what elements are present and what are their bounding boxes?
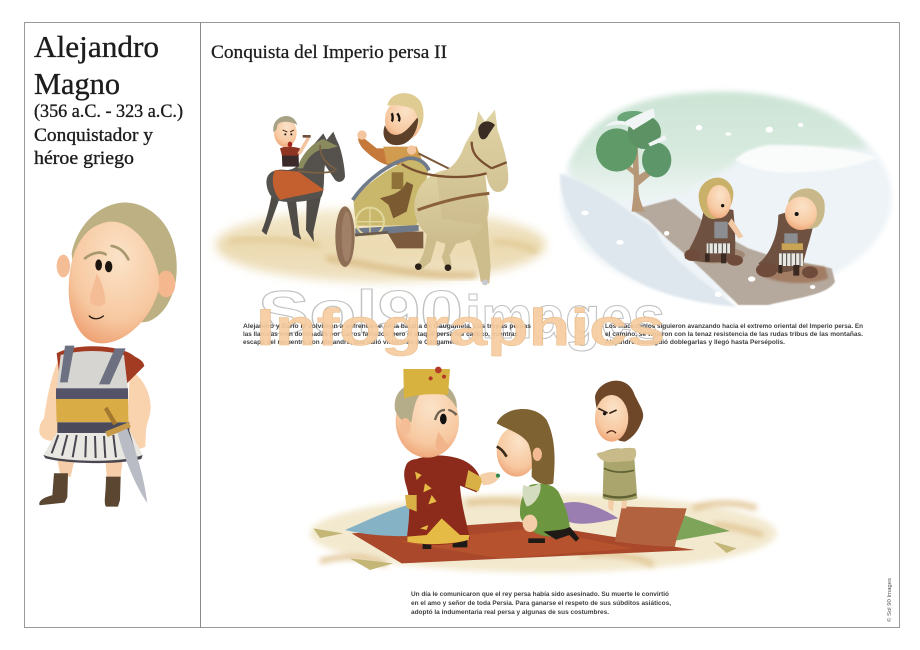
dark horse with rider xyxy=(262,116,345,242)
kneeling figure xyxy=(497,409,579,543)
sidebar heading: Alejandro Magno: Conquistador y xyxy=(34,125,154,146)
sidebar heading: Alejandro Magno: héroe griego xyxy=(34,148,134,169)
watermark: Sol90 images: Sol90 xyxy=(258,279,463,346)
skirt strips xyxy=(43,430,143,461)
marble floor xyxy=(310,494,777,573)
caption: bottom: en el amo y señor de toda Persia. Para ganarse el respeto de sus súbditos asiáticos, xyxy=(411,600,671,607)
sand ground xyxy=(216,208,546,282)
illustration: Alexander at the Persian court xyxy=(310,367,777,573)
chariot xyxy=(335,153,452,267)
caption: right: el camino, se toparon con la tenaz resistencia de las rudas tribus de las montañas. xyxy=(605,331,863,338)
snowflakes xyxy=(581,123,815,297)
ears xyxy=(57,255,70,277)
caption: left: escapó del recuentro con Alejandro, que salió victorioso de Gaugamela. xyxy=(243,339,460,346)
tunic xyxy=(57,346,144,384)
caption: left: las llanuras eran dominadas por carros falcados, pero el ataque persa fue caótico, mientras xyxy=(243,331,519,338)
illustration: chariot scene xyxy=(216,93,546,285)
rug xyxy=(352,522,695,563)
blue cushion xyxy=(345,504,418,536)
caption: right: Los macedonios siguieron avanzando hacia el extremo oriental del Imperio persa. En xyxy=(605,323,863,330)
soldier left xyxy=(684,178,745,266)
caption: bottom xyxy=(411,591,671,616)
caption: right xyxy=(605,323,863,346)
purple cushion xyxy=(563,502,618,524)
armour xyxy=(57,351,128,390)
credit: vertical: © Sol 90 Images xyxy=(886,578,893,622)
sword xyxy=(117,427,147,503)
watermark: Infographics: Infographics xyxy=(256,299,665,357)
legs xyxy=(56,453,123,477)
sidebar heading: Alejandro Magno: Magno xyxy=(34,66,120,101)
caption: bottom: adoptó la indumentaria real persa y algunas de sus costumbres. xyxy=(411,609,609,616)
sidebar heading: Alejandro Magno xyxy=(34,29,183,169)
illustration: snowy mountain path xyxy=(560,92,892,307)
watermark: Sol90 images xyxy=(258,279,665,351)
tree xyxy=(596,108,671,212)
caption: left: Alejandro y Darío III volvieron a enfrentarse en la batalla de Gaugamela. Las tropas persas xyxy=(243,323,532,330)
brown cushion xyxy=(615,507,687,547)
standing figure with crossed arms xyxy=(595,381,643,512)
hair back xyxy=(72,203,177,323)
king figure xyxy=(395,367,500,549)
sidebar heading: Alejandro Magno: Alejandro xyxy=(34,29,159,64)
charioteer xyxy=(357,93,424,165)
face xyxy=(85,246,128,259)
tassels xyxy=(313,528,737,570)
green cushion xyxy=(673,512,730,541)
sidebar heading: Alejandro Magno: (356 a.C. - 323 a.C.) xyxy=(34,101,183,122)
caption: right: Alejandro consiguió doblegarlas y llegó hasta Persépolis. xyxy=(605,339,785,346)
section heading: Conquista del Imperio persa II xyxy=(211,42,447,63)
arms xyxy=(39,360,70,441)
watermark: Sol90 images: images xyxy=(465,284,665,351)
tan horse xyxy=(402,110,508,285)
soldier right xyxy=(756,188,825,278)
caption: bottom: Un día le comunicaron que el rey persa había sido asesinado. Su muerte le convirtió xyxy=(411,591,669,598)
head xyxy=(69,222,159,343)
caption: left xyxy=(243,323,532,346)
path xyxy=(632,198,835,305)
winter landscape xyxy=(562,95,892,298)
illustration: Alejandro standing in armour xyxy=(39,203,177,507)
